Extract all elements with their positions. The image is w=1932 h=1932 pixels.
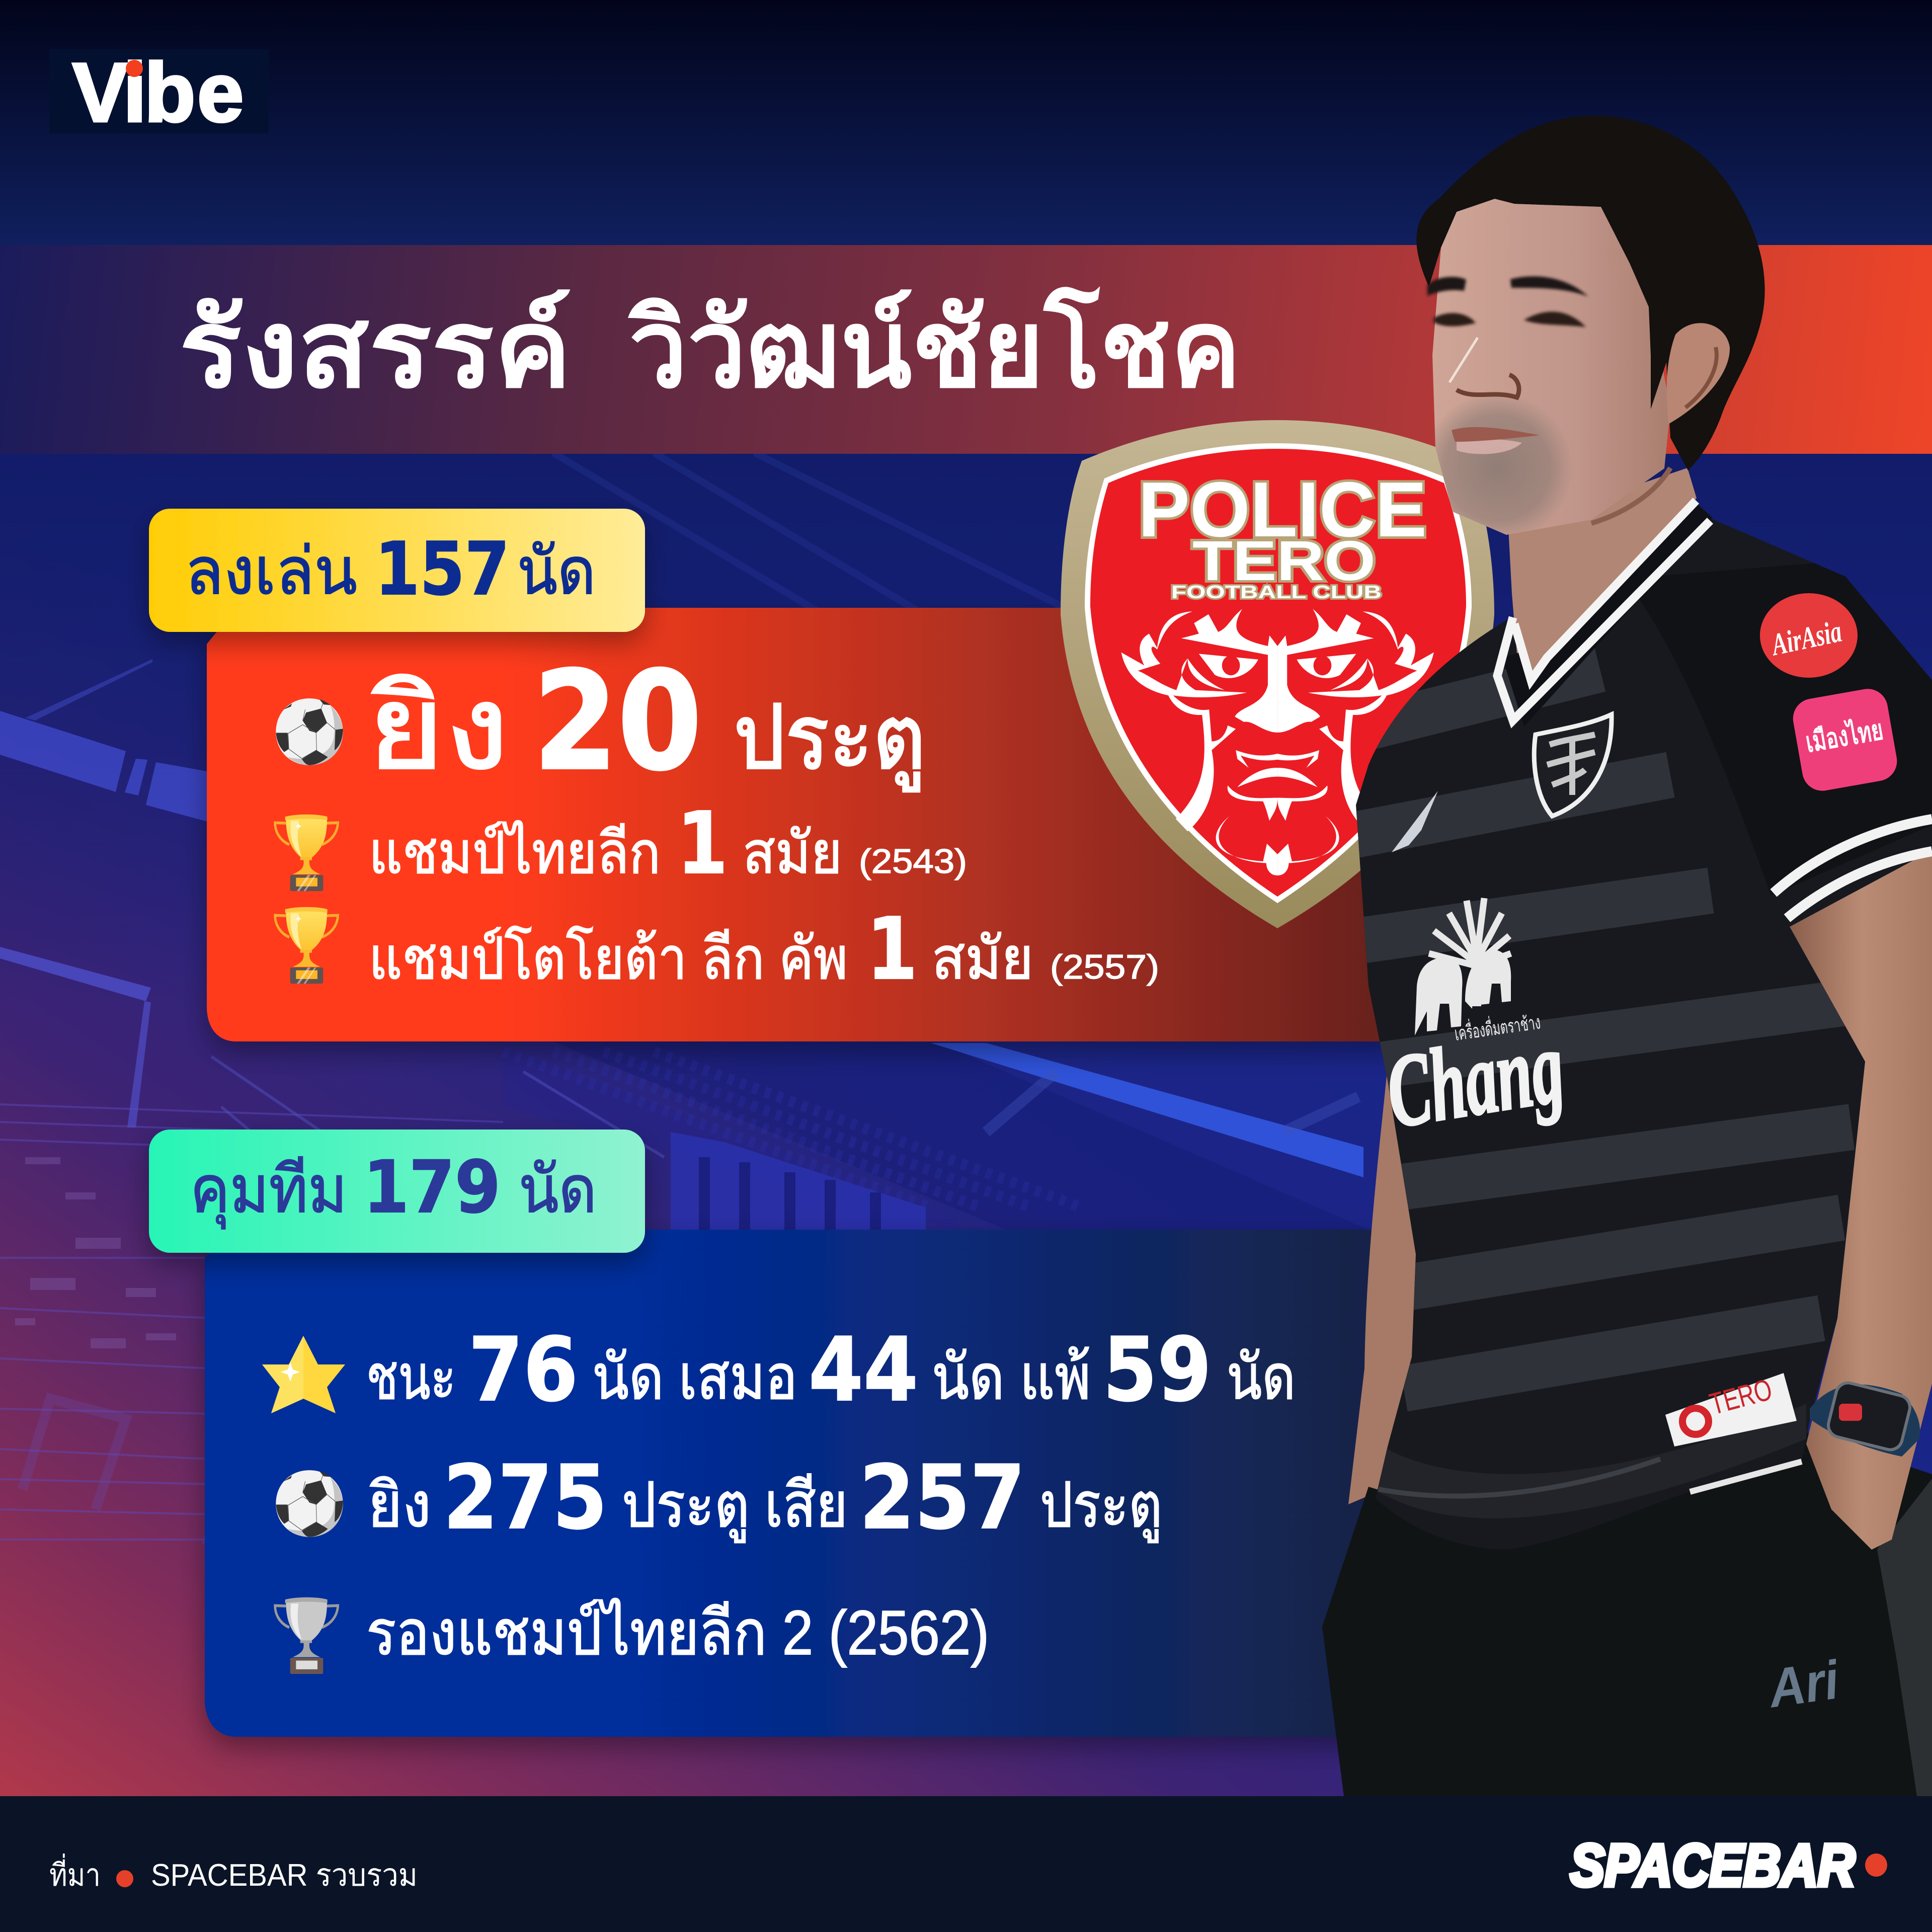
logo: Vibe (49, 46, 269, 139)
trousers (1322, 1431, 1932, 1796)
badge: Muang Thai: เมืองไทย (1803, 713, 1885, 758)
jersey (1333, 503, 1932, 1560)
title band (0, 245, 1932, 454)
tag: played 157: 157 (375, 527, 510, 612)
hair (1416, 116, 1765, 470)
Chang logo: เครื่องดื่มตราช้าง (1453, 1009, 1542, 1045)
tag: played 157 (149, 509, 645, 632)
forearm (1790, 850, 1932, 1550)
collar (1514, 509, 1703, 702)
tag: played 157: นัด (517, 534, 596, 608)
eyes (1433, 311, 1586, 327)
record row: นัด เสมอ (592, 1343, 797, 1412)
logo: Vibe: V (72, 46, 128, 139)
icon: Police Tero crest (1061, 420, 1494, 928)
tag: played 157: ลงเล่น (185, 534, 357, 608)
tag: coached 179: นัด (519, 1153, 597, 1226)
left arm (1348, 1057, 1424, 1504)
title: รังสรรค์ (179, 288, 572, 410)
head (1416, 116, 1765, 543)
record row: 76 (468, 1319, 578, 1421)
sleeve cuff (1774, 819, 1932, 918)
toyota cup row: แชมป์โตโยต้า ลีก คัพ (369, 926, 848, 991)
goals row: ยิง (368, 1471, 431, 1540)
Chang logo: Chang (1380, 1009, 1571, 1149)
crest lettering: POLICE (1138, 466, 1427, 553)
watch (1810, 1380, 1920, 1457)
thai league row: สมัย (743, 820, 842, 886)
icon: gold trophy (275, 815, 338, 891)
brows (1427, 276, 1588, 296)
tag: coached 179: 179 (363, 1145, 501, 1229)
source note: SPACEBAR รวบรวม (151, 1858, 418, 1893)
goals row: ประตู เสีย (622, 1471, 848, 1543)
crest lettering: FOOTBALL CLUB (1171, 582, 1382, 602)
source note: ที่มา (49, 1854, 101, 1893)
Tero patch: TERO (1706, 1372, 1776, 1421)
toyota cup row: 1 (866, 900, 918, 999)
crest lettering: TERO (1192, 529, 1376, 592)
background: stadium structure (0, 453, 1369, 1560)
card: blue (205, 1230, 1399, 1737)
icon: star (262, 1336, 345, 1413)
Tero patch (1665, 1372, 1797, 1446)
goals row: 257 (859, 1447, 1025, 1549)
thai league row: แชมป์ไทยลีก (369, 820, 661, 886)
goals row (367, 642, 926, 800)
thai league row: 1 (677, 794, 728, 894)
nose (1457, 375, 1519, 397)
logo: SPACEBAR: SPACEBAR (1570, 1832, 1855, 1899)
logo: Vibe: e (197, 46, 244, 139)
ear (1667, 323, 1730, 424)
thai league row (369, 794, 967, 894)
record row: ชนะ (366, 1343, 456, 1412)
goals row: 275 (443, 1447, 607, 1549)
title (179, 286, 1241, 410)
player cutout: Ari (1763, 1649, 1843, 1719)
title: วิวัฒน์ชัยโชค (627, 286, 1241, 410)
toyota cup row: สมัย (932, 926, 1033, 991)
Chang logo (1380, 898, 1571, 1149)
record row: นัด แพ้ (932, 1343, 1091, 1412)
footer bar (0, 1796, 1932, 1932)
thai league row: (2543) (859, 842, 967, 880)
crest on jersey (1534, 714, 1612, 816)
record row: นัด (1227, 1343, 1296, 1412)
tag: coached 179 (149, 1130, 645, 1253)
icon: silver trophy (275, 1597, 338, 1674)
goals row (368, 1447, 1162, 1549)
neck (1508, 468, 1697, 680)
mouth (1452, 427, 1540, 442)
panel: player career (149, 509, 1399, 1041)
record row (366, 1319, 1296, 1421)
crest lettering (1138, 466, 1427, 602)
icon: football 2 (276, 1470, 343, 1537)
card: red (207, 608, 1399, 1041)
icon: football (276, 698, 343, 765)
goals row: 20 (533, 642, 702, 800)
tag: coached 179: คุมทีม (190, 1153, 347, 1230)
kit brand mark (1392, 791, 1438, 852)
toyota cup row (369, 900, 1159, 999)
toyota cup row: (2557) (1050, 948, 1159, 986)
badge: Muang Thai (1790, 686, 1900, 794)
logo: Vibe: i (123, 46, 146, 139)
icon: gold trophy 2 (275, 907, 338, 984)
badge: AirAsia (1760, 593, 1858, 678)
panel: coach career (149, 1130, 1399, 1737)
runner-up row: รองแชมป์ไทยลีก 2 (2562) (366, 1598, 989, 1668)
source note (49, 1854, 418, 1893)
logo: Vibe: b (144, 46, 195, 139)
crest mask face (1121, 609, 1434, 875)
badge: AirAsia: AirAsia (1767, 614, 1844, 663)
goals row: ยิง (367, 663, 509, 793)
goals row: ประตู (734, 687, 926, 792)
record row: 44 (809, 1319, 918, 1421)
record row: 59 (1103, 1319, 1212, 1421)
player cutout (1322, 116, 1932, 1796)
goals row: ประตู (1040, 1471, 1162, 1543)
